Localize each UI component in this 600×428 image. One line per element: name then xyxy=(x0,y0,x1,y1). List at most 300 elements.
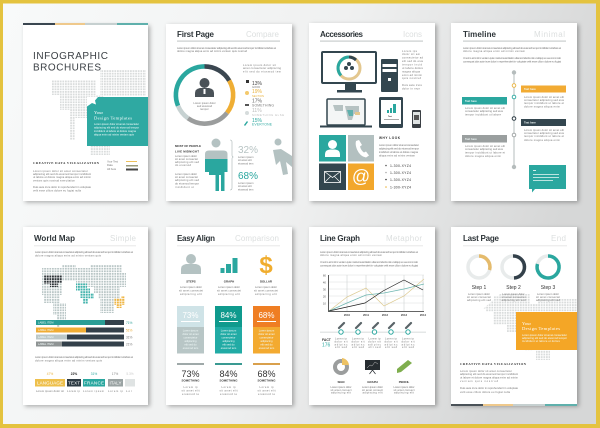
dotted world map xyxy=(42,265,126,327)
speech bubble xyxy=(529,165,566,192)
orange callout xyxy=(516,312,577,350)
line chart: 30 xyxy=(323,288,326,292)
card: 73 percent: 73% xyxy=(182,311,199,320)
stat: 84 xyxy=(215,363,242,396)
contact text: aliqua enim ad minim veniam xyxy=(379,154,416,158)
card: 73 percent: elit sed do xyxy=(184,342,197,346)
footer text: Lorem ipsum dolor sit amet consectetur xyxy=(460,369,512,373)
stats 32 and 68: sit amet elit xyxy=(238,158,252,162)
percentage list: 17% xyxy=(252,98,263,104)
card: 84 percent: dolor sit amet xyxy=(220,332,237,336)
panel: cover page xyxy=(23,23,148,201)
line chart: 2010 xyxy=(344,313,351,317)
title: INFOGRAPHIC xyxy=(33,51,108,62)
stat: 68: Lorem ip xyxy=(260,385,274,389)
people text xyxy=(175,144,201,189)
milestone row: Lorem ip xyxy=(385,336,398,340)
milestone row: dolor sit xyxy=(334,340,348,344)
intro text: Lorem ipsum dolor sit amet consectetur adipiscing elit sed do eiusmod tempor incididunt ut labore et xyxy=(177,46,276,50)
footer text: velit esse cillum dolore eu fugiat nulla xyxy=(33,188,82,192)
percentage list xyxy=(244,80,284,126)
contact list: 1-300-XYZ4 xyxy=(390,186,411,190)
icon: green pen xyxy=(397,360,412,373)
event: teal: tempor incididunt ut labore xyxy=(465,112,502,116)
event: yellow: consectetur adipiscing sed eius xyxy=(524,98,565,102)
step labels: adipiscing elit sed xyxy=(502,298,526,302)
contact text: incididunt ut labore et dolore magna xyxy=(379,150,418,154)
event: grey: consectetur adipiscing sed eius xyxy=(465,147,504,151)
column labels: adipiscing elit xyxy=(180,292,202,296)
milestone row: elit sed xyxy=(352,345,364,349)
step labels xyxy=(467,285,560,302)
icon captions: GRAPH xyxy=(367,380,378,384)
stat: 73: sit amet elit xyxy=(182,388,200,392)
legend xyxy=(107,160,138,171)
icon captions: sit amet consect xyxy=(394,388,415,392)
footer text: veniam quis nostrud xyxy=(460,379,498,383)
milestone row: elit sed xyxy=(402,345,414,349)
step labels: Step 2 xyxy=(506,285,521,291)
stats 32 and 68: sit amet elit xyxy=(238,184,252,188)
intro text xyxy=(35,250,133,258)
event: dark: Lorem ipsum dolor sit amet elit xyxy=(524,128,564,132)
side note: quis nostrud xyxy=(402,76,422,80)
intro text: dolore magna aliqua enim ad minim veniam xyxy=(463,49,526,53)
top colour stripe xyxy=(23,23,148,25)
milestone row: Lorem ip xyxy=(335,336,348,340)
stat: 68 xyxy=(253,363,280,396)
intro text: Lorem ipsum dolor sit amet consectetur adipiscing elit sed do eiusmod tempor incididunt ut labore et xyxy=(463,46,561,50)
country strip: 47% xyxy=(47,372,53,376)
intro text: consequat duis aute irure dolor in reprehenderit in voluptate velit esse cillum dolore eu fugiat xyxy=(320,264,418,268)
side note: dolor in repr xyxy=(402,86,420,90)
teal callout: incididunt ut labore et dolore magna xyxy=(94,129,136,133)
footer text: velit esse cillum dolore eu fugiat nulla xyxy=(460,390,510,394)
stats 32 and 68: Lorem ipsum xyxy=(238,155,254,159)
event: teal: consectetur adipiscing sed eius xyxy=(465,109,504,113)
column labels: Lorem ipsum dolor xyxy=(255,285,277,289)
card: 84 percent xyxy=(215,306,242,354)
panel: timeline xyxy=(451,23,577,201)
side note: consectetur ad xyxy=(402,56,424,60)
panel: first page xyxy=(166,24,292,201)
milestone row xyxy=(320,323,426,349)
contact text: Lorem ipsum dolor sit amet consectetur xyxy=(379,143,419,147)
donut caption xyxy=(193,101,216,111)
ring: step 2 xyxy=(502,256,525,278)
milestone row: 176 xyxy=(322,342,331,348)
milestone row: Lorem ip xyxy=(402,336,414,340)
people text: adipiscing elit sed xyxy=(175,178,200,182)
right note xyxy=(243,63,282,74)
panel: last page xyxy=(451,227,577,406)
card: 84 percent: consectetur xyxy=(222,336,236,340)
step labels: adipiscing elit sed xyxy=(467,298,492,302)
side note: magna aliqua xyxy=(402,70,420,74)
stats 32 and 68: 68% xyxy=(238,171,258,182)
orange callout: Design Templates xyxy=(522,326,560,331)
heading xyxy=(320,30,423,42)
country strip: Lorem ipsum dolor sit xyxy=(36,389,64,393)
orange callout: Your xyxy=(522,321,531,326)
intro text xyxy=(177,46,276,53)
footer text: adipiscing elit sed do eiusmod tempor incididunt xyxy=(33,172,91,176)
card: 73 percent: dolor sit amet xyxy=(182,332,199,336)
heading: Easy Align xyxy=(177,234,215,243)
step labels: Step 1 xyxy=(472,285,486,291)
column labels: Lorem ipsum dolor xyxy=(180,285,202,289)
event: dark: dolore magna aliqua enim xyxy=(524,138,561,142)
heading: Last Page xyxy=(463,234,500,243)
orange callout: incididunt ut labore et dolore xyxy=(522,339,560,343)
event: dark xyxy=(521,119,566,142)
icon: tablet xyxy=(379,97,403,128)
contact text: WHY LOOK xyxy=(379,136,401,140)
event: teal: Text here xyxy=(465,99,477,103)
card: 73 percent: adipiscing xyxy=(185,339,197,343)
milestone row: adipisc xyxy=(334,342,348,346)
card: 68 percent: 68% xyxy=(258,311,275,320)
country strip: Lorem ipsum xyxy=(83,389,105,393)
stat: 84: SOMETHING xyxy=(220,378,238,382)
stat: 68: 68% xyxy=(257,369,276,379)
panel: line graph xyxy=(309,227,435,405)
icon tile: person xyxy=(319,135,346,162)
country strip: Lor xyxy=(126,389,132,393)
stat: 84: 84% xyxy=(219,369,238,379)
heading: Metaphor xyxy=(386,234,422,243)
stacked bar list: LABEL ITEM xyxy=(38,335,54,339)
contact list: 1-300-XYZ4 xyxy=(390,164,411,168)
event: yellow: Text here xyxy=(524,87,536,91)
side note: Lorem ips xyxy=(402,49,418,53)
side note: dolor sit am xyxy=(402,52,421,56)
event: grey xyxy=(462,135,507,158)
card: 68 percent: eiusmod tem xyxy=(259,346,275,350)
stats 32 and 68 xyxy=(238,145,258,192)
column labels: adipiscing elit xyxy=(218,292,240,296)
card: 84 percent: adipiscing xyxy=(223,339,235,343)
icon tile: phone xyxy=(348,135,374,162)
teal callout xyxy=(87,97,148,146)
intro text: dolore magna aliqua enim ad minim veniam quis nostrud xyxy=(177,49,248,53)
people text: sit amet consectet xyxy=(175,157,198,161)
card: 68 percent: dolor sit amet xyxy=(258,332,275,336)
intro text: dolore magna aliqua enim ad minim veniam quis xyxy=(35,254,102,258)
stat: 73: 73% xyxy=(181,369,200,379)
contact list: 1-300-XYZ4 xyxy=(390,178,411,182)
percentage list: SOMETHING xyxy=(252,104,274,108)
milestone row: elit sed xyxy=(335,345,348,349)
stats 32 and 68: eiusmod tem xyxy=(238,162,254,166)
event: teal xyxy=(462,97,507,116)
ring: step 1 xyxy=(468,256,490,278)
country strip: 31% xyxy=(91,372,97,376)
column labels: DOLLAR xyxy=(260,280,273,284)
icon tile: at sign: @ xyxy=(352,166,370,186)
card: 68 percent: elit sed do xyxy=(260,342,273,346)
event: yellow: Lorem ipsum dolor sit amet elit xyxy=(524,95,564,99)
contact list xyxy=(385,164,411,190)
step labels: sit amet consectet xyxy=(536,295,560,299)
percentage list: EVERYONE xyxy=(252,122,273,126)
side note xyxy=(402,49,424,90)
title xyxy=(33,51,108,74)
footer text: Lorem ipsum dolor sit amet consectetur xyxy=(33,169,88,173)
card: 68 percent xyxy=(253,306,280,354)
right note: amet consectetur adipiscing xyxy=(243,66,282,70)
legend: Your Text xyxy=(107,160,118,164)
percentage list: SOMETHING ELSE xyxy=(252,113,284,117)
footer text: veniam quis nostrud exercitation xyxy=(33,178,76,182)
timeline line and nodes xyxy=(512,70,516,169)
right note: Lorem ipsum dolor sit xyxy=(243,63,276,67)
card: 68 percent: Lorem ipsum xyxy=(259,328,275,332)
stacked bar list xyxy=(36,320,133,346)
icon captions: PENCIL xyxy=(399,380,410,384)
step labels: Lorem ipsum dolor xyxy=(502,292,525,296)
stacked bar list: 71% xyxy=(126,321,133,325)
event: grey: dolore magna aliqua enim xyxy=(465,154,502,158)
icon: bar chart xyxy=(220,258,238,273)
icon tile: mail xyxy=(319,164,346,190)
heading xyxy=(463,234,567,246)
step labels: sit amet consectet xyxy=(467,295,491,299)
title: BROCHURES xyxy=(33,62,101,74)
icon: person xyxy=(181,254,201,274)
teal callout: Lorem ipsum dolor sit amet consectetur xyxy=(94,122,139,126)
stat: 84: sit amet elit xyxy=(220,388,238,392)
heading: Minimal xyxy=(534,30,565,39)
card: 84 percent: eiusmod tem xyxy=(221,346,237,350)
orange callout: Lorem ipsum dolor sit amet consectetur xyxy=(522,333,567,337)
icon: person split chart xyxy=(205,138,228,191)
heading: Icons xyxy=(403,30,422,39)
stat: 68: eiusmod te xyxy=(258,392,276,396)
side note: ut labore dolore xyxy=(402,66,424,70)
milestone row: FACT xyxy=(322,338,332,342)
icon: tablet: Text xyxy=(388,115,392,118)
icon captions: sit amet consect xyxy=(362,388,383,392)
legend: Data xyxy=(107,163,113,167)
intro text: dolore magna aliqua enim ad minim veniam xyxy=(320,253,383,257)
icon captions: sit amet consect xyxy=(330,388,352,392)
event: grey: Lorem ipsum dolor sit amet elit xyxy=(465,144,505,148)
column labels: GRAPH xyxy=(224,280,234,284)
people text: do eiusmod xyxy=(175,163,192,167)
orange callout: adipiscing elit sed do eiusmod tempor xyxy=(522,336,567,340)
stacked bar list: 31% xyxy=(126,336,133,340)
panel: easy align xyxy=(166,227,292,405)
step labels: Lorem ipsum dolor xyxy=(537,292,559,296)
side note: enim ad minim xyxy=(402,73,423,77)
event: yellow xyxy=(521,86,566,108)
intro text: Ut enim ad minim veniam quis nostrud exercitation ullamco laboris nisi ut aliquip ex ea commodo xyxy=(463,56,562,60)
icon captions: Lorem ipsum dolor xyxy=(394,385,415,389)
milestone row: elit sed xyxy=(385,345,398,349)
milestone row: adipisc xyxy=(384,342,398,346)
icon: laptop xyxy=(320,99,372,128)
line chart: 10 xyxy=(323,302,326,306)
stats 32 and 68: 32% xyxy=(238,145,258,156)
percentage list: SECTION xyxy=(252,94,264,98)
percentage list: 15% xyxy=(252,118,263,124)
card: 73 percent: consectetur xyxy=(184,336,198,340)
intro text xyxy=(320,250,418,268)
people text: LIVE MIDNIGHT xyxy=(175,150,199,154)
stats 32 and 68: eiusmod tem xyxy=(238,188,254,192)
footer text xyxy=(33,161,100,192)
side note: tempor incid xyxy=(402,62,422,66)
heading: First Page xyxy=(177,30,215,39)
country strip: Lorem ip xyxy=(108,389,124,393)
icon: walking figure xyxy=(273,138,292,175)
donut chart xyxy=(176,66,233,124)
icon: monitor xyxy=(322,52,376,92)
teal callout: Design Templates xyxy=(94,116,132,120)
stacked bar list: LABEL ITEM xyxy=(38,342,54,346)
card: 73 percent: Lorem ipsum xyxy=(183,328,199,332)
people text: Lorem ipsum dolor xyxy=(175,154,197,158)
column labels: adipiscing elit xyxy=(255,292,277,296)
country strip: FRANCE xyxy=(84,380,104,386)
footer text: adipiscing elit sed do eiusmod tempor incididunt xyxy=(460,372,518,376)
percentage list: 13% xyxy=(252,81,263,87)
donut caption: Lorem ipsum dolor xyxy=(193,101,216,105)
icon captions: SIGN xyxy=(337,380,345,384)
stacked bar list: 21% xyxy=(126,342,133,346)
bottom colour stripe xyxy=(451,404,577,406)
donut caption: tempor xyxy=(200,107,209,111)
event: dark: Text here xyxy=(524,120,536,124)
heading: Accessories xyxy=(320,30,364,39)
footer text: CREATIVE DATA VISUALIZATION xyxy=(460,362,527,366)
stat: 68: SOMETHING xyxy=(258,378,276,382)
people text: Lorem ipsum dolor xyxy=(175,172,197,176)
heading: End xyxy=(551,234,566,243)
card: 68 percent: adipiscing xyxy=(261,339,273,343)
milestone row: adipisc xyxy=(352,342,365,346)
contact text xyxy=(379,136,419,158)
milestone row: adipisc xyxy=(368,342,382,346)
country strip: LANGUAGE xyxy=(37,380,63,386)
footer text: ut labore et dolore magna aliqua enim ad minim xyxy=(460,376,519,380)
dotted map xyxy=(52,70,146,155)
step labels: sit amet consectet xyxy=(502,295,526,299)
ring: step 3 xyxy=(537,256,559,278)
teal callout: Your xyxy=(94,110,103,115)
column labels: STEPS xyxy=(186,280,196,284)
column labels: sit amet consectet xyxy=(217,288,241,292)
people text: incididunt ut xyxy=(175,185,194,189)
second text block xyxy=(35,355,133,362)
icon captions: Lorem ipsum dolor xyxy=(362,385,383,389)
event: yellow: tempor incididunt ut labore et xyxy=(524,101,564,105)
event: yellow: dolore magna aliqua enim xyxy=(524,104,561,108)
card: 84 percent: Lorem ipsum xyxy=(221,328,237,332)
milestone row: dolor sit xyxy=(384,340,398,344)
stat: 73: SOMETHING xyxy=(182,378,200,382)
line chart: 2012 xyxy=(382,313,389,317)
icon captions: adipiscing elit xyxy=(394,390,414,394)
heading: Simple xyxy=(110,234,137,243)
line chart: 2013 xyxy=(401,313,408,317)
event: grey: Text here xyxy=(465,137,477,141)
line chart: 40 xyxy=(323,280,326,284)
line chart: 2014 xyxy=(420,313,427,317)
panel: accessories xyxy=(309,23,435,201)
line chart: 2011 xyxy=(363,313,369,317)
contact list: 1-300-XYZ4 xyxy=(390,171,411,175)
column labels: sit amet consectet xyxy=(179,288,203,292)
card: 84 percent: 84% xyxy=(220,311,237,320)
icon captions: adipiscing elit xyxy=(362,390,383,394)
step labels: Step 3 xyxy=(541,285,555,291)
milestone row: dolor sit xyxy=(352,340,365,344)
country strip: ITALY xyxy=(110,380,122,386)
second text block: dolore magna aliqua enim ad minim veniam quis xyxy=(35,358,103,362)
percentage list: 19% xyxy=(252,89,263,95)
stacked bar list: 51% xyxy=(126,328,133,332)
icon: phone xyxy=(412,110,421,128)
icon: pie xyxy=(335,358,349,373)
footer text: ut labore et dolore magna aliqua enim ad minim xyxy=(33,175,92,179)
event: dark: consectetur adipiscing sed eius xyxy=(524,131,565,135)
footer text: CREATIVE DATA VISUALIZATION xyxy=(33,161,100,165)
dotted map xyxy=(483,294,577,360)
event: teal: Lorem ipsum dolor sit amet elit xyxy=(465,106,505,110)
icon: dollar: $ xyxy=(259,252,273,279)
icon: presentation board xyxy=(365,360,380,374)
heading: World Map xyxy=(34,234,75,243)
legend: All here xyxy=(107,167,117,171)
card: 84 percent: elit sed do xyxy=(222,342,235,346)
footer text xyxy=(460,362,527,394)
column labels: sit amet consectet xyxy=(254,288,278,292)
milestone row: dolor sit xyxy=(368,340,381,344)
people text: do eiusmod tempor xyxy=(175,182,199,186)
heading xyxy=(177,30,280,42)
icon: computer tower xyxy=(381,59,398,92)
stat: 73 xyxy=(177,363,204,396)
heading xyxy=(34,234,137,246)
heading: Comparison xyxy=(235,234,279,243)
stat: 73: Lorem ip xyxy=(184,385,198,389)
bracket xyxy=(230,140,234,190)
intro text: consequat duis aute irure dolor in reprehenderit in voluptate velit esse cillum dolore eu fugiat xyxy=(463,60,561,64)
donut caption: sed eiusmod xyxy=(197,104,213,108)
icon captions: Lorem ipsum dolor xyxy=(330,385,352,389)
right note: elit sed do eiusmod tem xyxy=(243,70,282,74)
country strip: 22% xyxy=(71,372,77,376)
country strip: 5.3% xyxy=(126,372,134,376)
country strip: Lorem ip xyxy=(67,389,80,393)
column labels xyxy=(179,280,278,296)
line chart: 60 xyxy=(323,274,326,278)
heading xyxy=(177,234,280,246)
stat: 84: eiusmod te xyxy=(220,392,238,396)
line chart: 20 xyxy=(323,294,326,298)
intro text: Ut enim ad minim veniam quis nostrud exercitation ullamco laboris nisi ut aliquip ex ea commodo xyxy=(320,260,418,264)
heading: Compare xyxy=(246,30,280,39)
step labels: Lorem ipsum dolor xyxy=(468,292,490,296)
stat: 68: sit amet elit xyxy=(258,388,276,392)
milestone row: Lorem ip xyxy=(352,336,364,340)
side note: Duis aute irure xyxy=(402,83,422,87)
people text: sit amet consectet xyxy=(175,175,198,179)
stat: 84: Lorem ip xyxy=(222,385,236,389)
heading: Timeline xyxy=(463,30,497,39)
